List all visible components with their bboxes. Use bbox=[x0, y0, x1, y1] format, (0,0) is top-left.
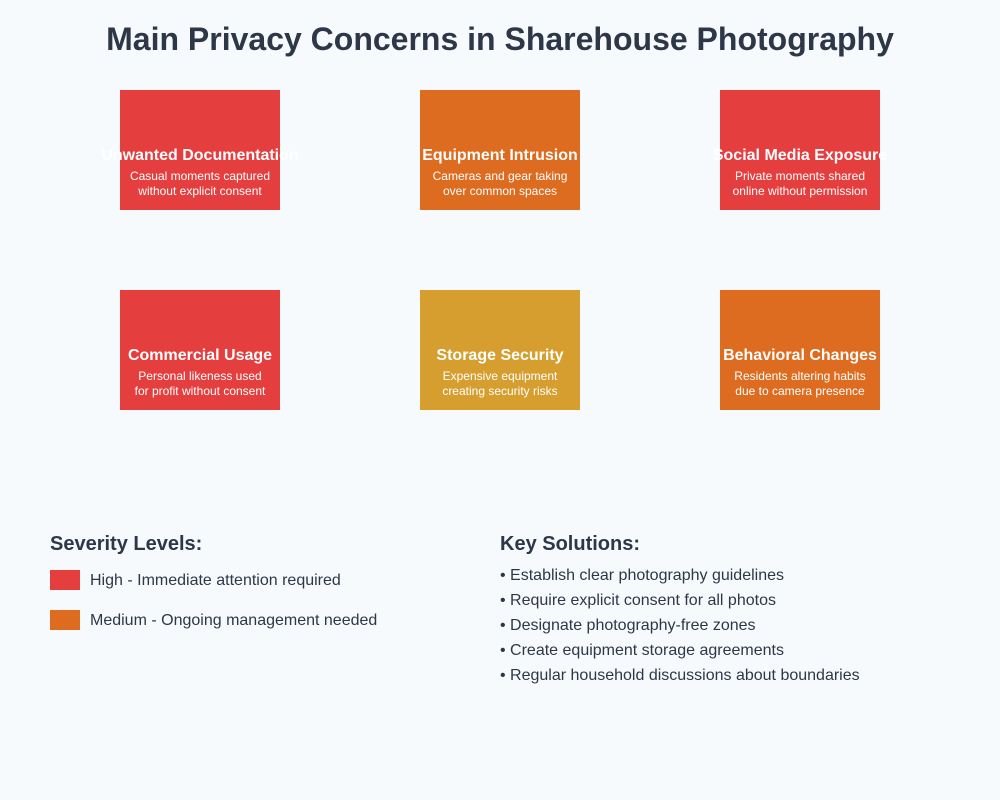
panel: social media exposure: online without permission bbox=[733, 184, 867, 198]
panel: storage security bbox=[420, 290, 580, 410]
text block: key solutions: • Designate photography-free zones bbox=[500, 617, 756, 634]
panel: commercial usage: for profit without consent bbox=[135, 384, 266, 398]
panel: unwanted documentation: Unwanted Documentation bbox=[101, 147, 299, 164]
panel: behavioral changes: Residents altering habits bbox=[734, 369, 866, 383]
legend: severity levels: Severity Levels: bbox=[50, 533, 202, 555]
panel: commercial usage: Commercial Usage bbox=[128, 347, 272, 364]
panel: commercial usage bbox=[120, 290, 280, 410]
panel: storage security: Expensive equipment bbox=[443, 369, 558, 383]
panel: equipment intrusion: Equipment Intrusion bbox=[422, 147, 578, 164]
panel: social media exposure bbox=[713, 90, 887, 210]
text block: key solutions: • Require explicit consent for all photos bbox=[500, 592, 776, 609]
panel: unwanted documentation: Casual moments captured bbox=[130, 169, 270, 183]
panel: commercial usage: Personal likeness used bbox=[138, 369, 262, 383]
legend: severity levels: Medium - Ongoing management needed bbox=[90, 612, 377, 629]
panel: equipment intrusion: over common spaces bbox=[443, 184, 557, 198]
text block: key solutions: • Regular household discussions about boundaries bbox=[500, 667, 860, 684]
panel: equipment intrusion bbox=[420, 90, 580, 210]
panel: unwanted documentation: without explicit consent bbox=[137, 184, 262, 198]
text block: key solutions bbox=[500, 533, 860, 684]
panel: social media exposure: Private moments shared bbox=[735, 169, 865, 183]
panel: storage security: creating security risks bbox=[442, 384, 558, 398]
panel: equipment intrusion: Cameras and gear taking bbox=[433, 169, 567, 183]
text block: key solutions: • Create equipment storage agreements bbox=[500, 642, 784, 659]
legend: severity levels: High - Immediate attention required bbox=[90, 572, 341, 589]
panel: social media exposure: Social Media Exposure bbox=[713, 147, 887, 164]
panel: storage security: Storage Security bbox=[436, 347, 564, 364]
panel: behavioral changes: due to camera presence bbox=[735, 384, 865, 398]
panel: unwanted documentation bbox=[101, 90, 299, 210]
title: Main Privacy Concerns in Sharehouse Photography bbox=[106, 21, 894, 57]
text block: key solutions: • Establish clear photography guidelines bbox=[500, 567, 784, 584]
panel: behavioral changes bbox=[720, 290, 880, 410]
legend: severity levels bbox=[50, 533, 377, 630]
panel: behavioral changes: Behavioral Changes bbox=[723, 347, 877, 364]
text block: key solutions: Key Solutions: bbox=[500, 533, 640, 555]
